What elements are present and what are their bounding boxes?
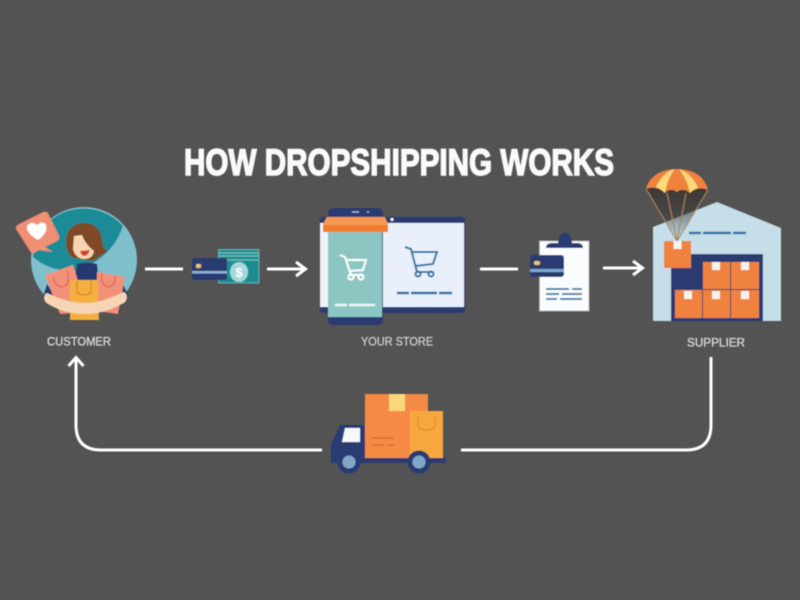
icon: navy shirt (43, 262, 129, 302)
front wheel (338, 450, 360, 474)
warehouse building (653, 202, 781, 321)
parachute strings (646, 189, 708, 241)
credit card (530, 255, 564, 277)
parachute canopy (646, 169, 708, 193)
browser text bars (397, 292, 452, 294)
clipboard sheet (540, 241, 589, 311)
parcel lines (372, 438, 394, 445)
icon: left shopping bag (45, 265, 88, 314)
orange awning (323, 217, 388, 232)
phone text bars (335, 304, 375, 306)
connector line: customer to payment (145, 268, 183, 270)
icon: coin with dollar: $ (235, 265, 243, 280)
your store label: YOUR STORE (361, 334, 433, 348)
return line: supplier to truck (461, 357, 711, 450)
browser window (320, 217, 465, 313)
rear wheel (408, 450, 430, 474)
supplier label: SUPPLIER (687, 336, 745, 350)
customer illustration (16, 207, 137, 320)
blue cart (405, 247, 437, 276)
clipboard clip (546, 233, 583, 248)
icon: woman's face (73, 235, 94, 259)
parachute shroud shade (647, 187, 708, 241)
icon: backdrop circle (31, 207, 137, 313)
delivery truck (331, 394, 446, 474)
icon: woman's hair (66, 223, 108, 261)
warehouse sign dashes (689, 232, 746, 234)
cab window (342, 428, 360, 442)
phone (328, 208, 383, 325)
supplier illustration (646, 169, 781, 321)
yellow bag (410, 411, 443, 458)
icon: arms (44, 292, 127, 314)
icon: smile (80, 250, 90, 256)
falling box (664, 241, 691, 268)
icon: dark teal shade (33, 209, 123, 271)
arrow: order to supplier (603, 261, 642, 275)
icon: center yellow bag (70, 280, 99, 320)
store illustration (320, 208, 465, 325)
icon: speech bubble with heart (16, 212, 59, 253)
customer label: CUSTOMER (47, 334, 111, 348)
return arrow: truck to customer (68, 358, 322, 450)
white cart (340, 255, 366, 280)
icon: banknotes (218, 250, 259, 283)
title: HOW DROPSHIPPING WORKS (184, 142, 614, 183)
icon: credit card (192, 258, 227, 280)
parcel tape (389, 394, 405, 411)
order clipboard icon (530, 233, 589, 311)
payment icon: card and cash (192, 250, 259, 283)
warehouse door (671, 254, 763, 321)
connector line: store to order (480, 268, 518, 270)
box tags (684, 262, 749, 299)
icon: right shopping bag (96, 272, 125, 314)
stacked boxes (675, 262, 759, 318)
large orange parcel (365, 394, 428, 458)
order text lines (546, 289, 582, 299)
truck cab (331, 425, 446, 463)
arrow: payment to store (267, 262, 306, 276)
